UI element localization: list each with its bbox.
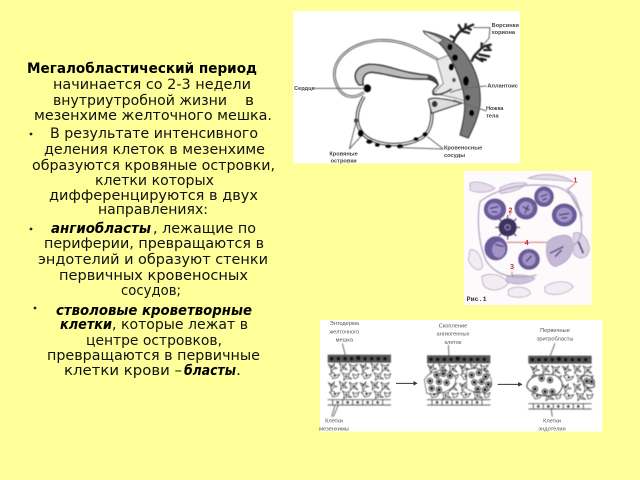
bullet: intensive division: деления клеток в мезенхиме: [44, 142, 265, 158]
leader lines: [313, 28, 490, 149]
bullet: angioblasts: первичных кровеносных: [59, 268, 248, 284]
diagram labels: хориона: [492, 30, 516, 36]
text block: intro: мезенхиме желточного мешка.: [34, 108, 272, 124]
panel: embryo diagram: [293, 11, 520, 165]
stage captions: Энтодерма: [330, 321, 360, 327]
bullet: angioblasts: [30, 221, 268, 299]
stage captions: Клетки: [543, 418, 561, 424]
large pale cell: [546, 235, 572, 267]
bullet: intensive division: клетки которых: [95, 173, 214, 189]
bullet: stem hematopoietic cells: центре островков,: [86, 333, 222, 349]
blood cells in chorion: [441, 44, 474, 116]
blood islands: [354, 101, 437, 148]
bullet: stem hematopoietic cells: превращаются в первичные: [47, 348, 260, 364]
arrow: stage 2 to stage 3: [498, 382, 522, 386]
bullet: intensive division: дифференцируются в двух: [49, 188, 258, 204]
bullet: stem hematopoietic cells: клетки: [60, 317, 112, 333]
callout numbers: 1: [573, 176, 577, 185]
bullet: stem hematopoietic cells: .: [236, 363, 241, 379]
stage 2: angioblast clusters: [424, 355, 492, 405]
text block: intro: в: [245, 93, 254, 109]
diagram labels: островки: [331, 159, 357, 165]
bullet: intensive division: образуются кровяные островки,: [32, 158, 275, 174]
bullet: intensive division: направлениях:: [98, 202, 208, 218]
embryo body: [355, 64, 438, 85]
diagram labels: Ножка: [486, 106, 504, 112]
panel: histology micrograph: [464, 171, 592, 305]
diagram labels: Кровяные: [329, 151, 358, 157]
leader lines: [507, 241, 547, 244]
bullet: stem hematopoietic cells: клетки крови –: [64, 363, 182, 379]
allantois region: [433, 52, 475, 105]
figure caption: Рис.1: [467, 295, 487, 303]
bullet: stem hematopoietic cells: , которые лежат в: [112, 317, 248, 333]
stage captions: Клетки: [325, 418, 343, 424]
stage captions: клеток: [445, 340, 462, 346]
stage captions: эндотелия: [538, 427, 566, 433]
bullet: stem hematopoietic cells: бласты: [184, 363, 236, 379]
panel: stages of blood island formation: [319, 320, 602, 433]
bullet: angioblasts: , лежащие по: [153, 221, 256, 237]
bullet: angioblasts: ангиобласты: [51, 221, 151, 237]
outer cell layer: [468, 175, 589, 297]
stage captions: мезенхимы: [319, 427, 349, 433]
bullet: angioblasts: периферии, превращаются в: [44, 236, 264, 252]
diagram labels: Аллантоис: [487, 83, 518, 89]
callout numbers: 4: [525, 238, 530, 247]
callout numbers: [508, 176, 577, 271]
stage captions: Скопление: [439, 323, 467, 329]
arrow: stage 1 to stage 2: [396, 381, 417, 385]
bullet: stem hematopoietic cells: стволовые кроветворные: [56, 303, 252, 319]
endothelium ring: [478, 185, 582, 277]
text block: intro: начинается со 2-3 недели: [53, 77, 251, 93]
mitotic cell: [495, 215, 520, 240]
leader lines: [332, 343, 555, 417]
chorionic villi: [450, 23, 492, 62]
stage captions: ангиогенных: [437, 332, 470, 338]
amnion outline: [334, 40, 442, 97]
diagram labels: тела: [486, 113, 499, 119]
bullet: intensive division: [30, 126, 275, 218]
stage captions: эритробласты: [536, 336, 573, 342]
diagram labels: сосуды: [444, 153, 465, 159]
stage captions: Первичные: [540, 328, 570, 334]
primary blood cells: [484, 187, 576, 269]
heading: megaloblastic period: Мегалобластический период: [27, 61, 257, 77]
text block: intro: внутриутробной жизни: [53, 93, 227, 109]
stage 3: primary erythroblasts: [527, 356, 594, 409]
text column: [27, 61, 275, 379]
callout numbers: 3: [510, 262, 514, 271]
stage captions: [319, 321, 573, 433]
diagram labels: Кровеносные: [444, 146, 482, 152]
callout numbers: 2: [508, 205, 512, 214]
yolk sac: [357, 97, 432, 145]
chorion band: [423, 31, 480, 138]
bullet: angioblasts: сосудов;: [121, 283, 181, 299]
bullet: angioblasts: эндотелий и образуют стенки: [38, 252, 268, 268]
heart: [364, 84, 371, 92]
stage 1: mesenchyme: [328, 355, 391, 405]
bullet: intensive division: В результате интенсивного: [50, 126, 258, 142]
bullet: stem hematopoietic cells: [34, 303, 260, 379]
stage captions: желточного: [329, 329, 359, 335]
text block: intro: [34, 77, 272, 124]
stage captions: мешка: [336, 338, 354, 344]
diagram labels: [294, 23, 520, 165]
diagram labels: Сердце: [294, 86, 315, 92]
diagram labels: Ворсинки: [492, 23, 520, 29]
